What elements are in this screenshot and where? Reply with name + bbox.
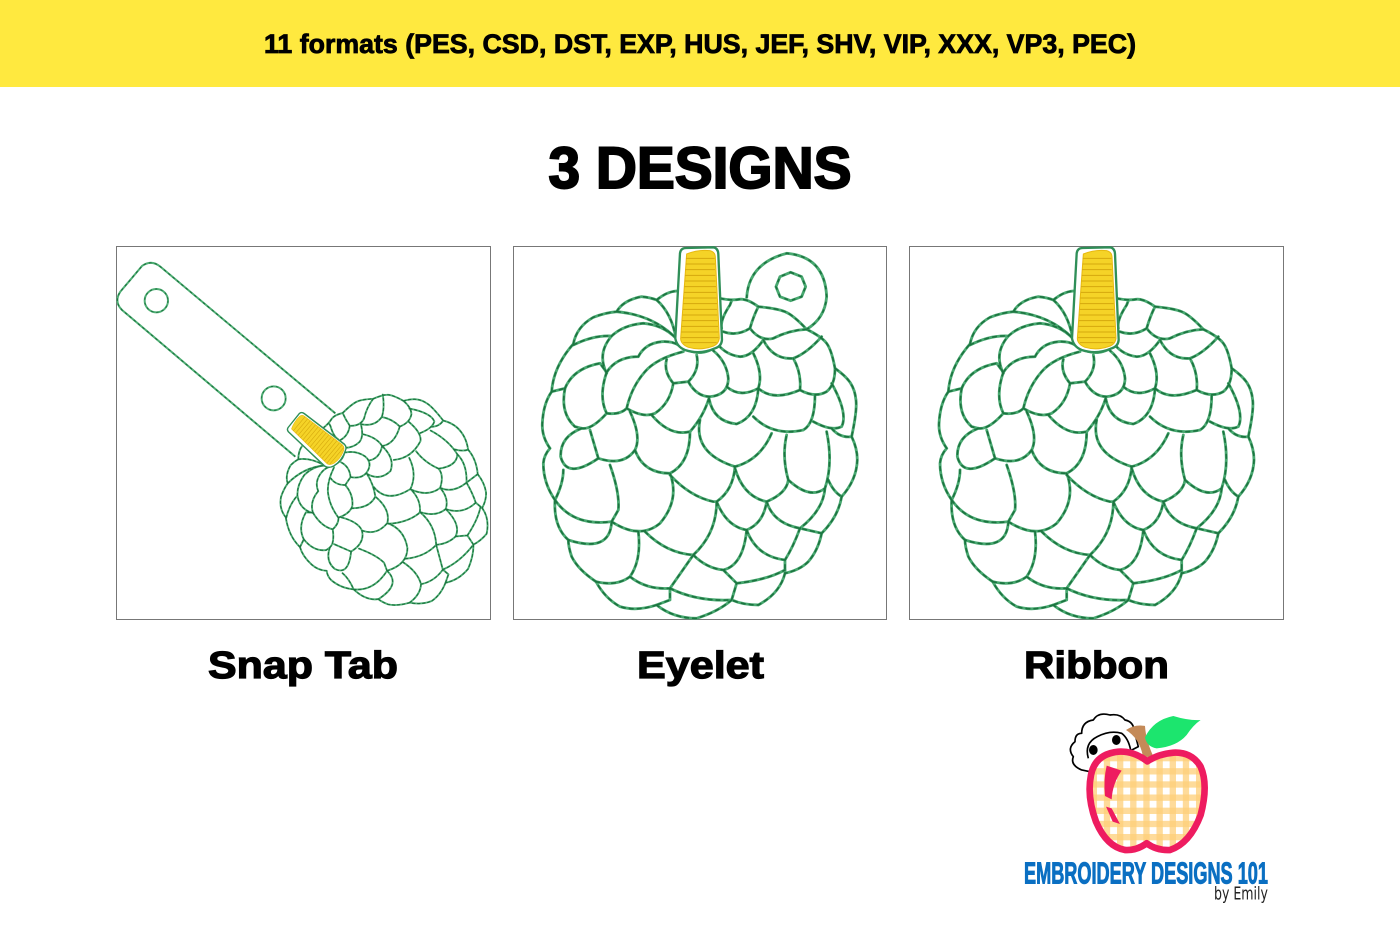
icon: apple highlights — [1104, 766, 1122, 824]
icon: sheep — [1070, 714, 1138, 772]
icon: leaf — [1145, 716, 1201, 748]
header banner — [0, 0, 1400, 87]
ribbon design — [939, 247, 1254, 618]
title: 3 DESIGNS — [548, 136, 852, 201]
panel: ribbon — [910, 246, 1284, 620]
logo — [1024, 714, 1268, 904]
icon: apple — [1090, 752, 1205, 850]
label: ribbon: Ribbon — [1024, 645, 1169, 687]
panel: eyelet — [514, 246, 886, 620]
panel: snap tab — [116, 246, 533, 643]
icon: apple stalk — [1126, 725, 1155, 760]
logo tagline: by Emily — [1214, 884, 1268, 904]
label: snap tab: Snap Tab — [208, 645, 398, 687]
snap tab design — [117, 263, 533, 643]
header banner: 11 formats (PES, CSD, DST, EXP, HUS, JEF, SHV, VIP, XXX, VP3, PEC) — [264, 29, 1136, 59]
eyelet design — [542, 247, 857, 618]
label: eyelet: Eyelet — [637, 645, 764, 687]
